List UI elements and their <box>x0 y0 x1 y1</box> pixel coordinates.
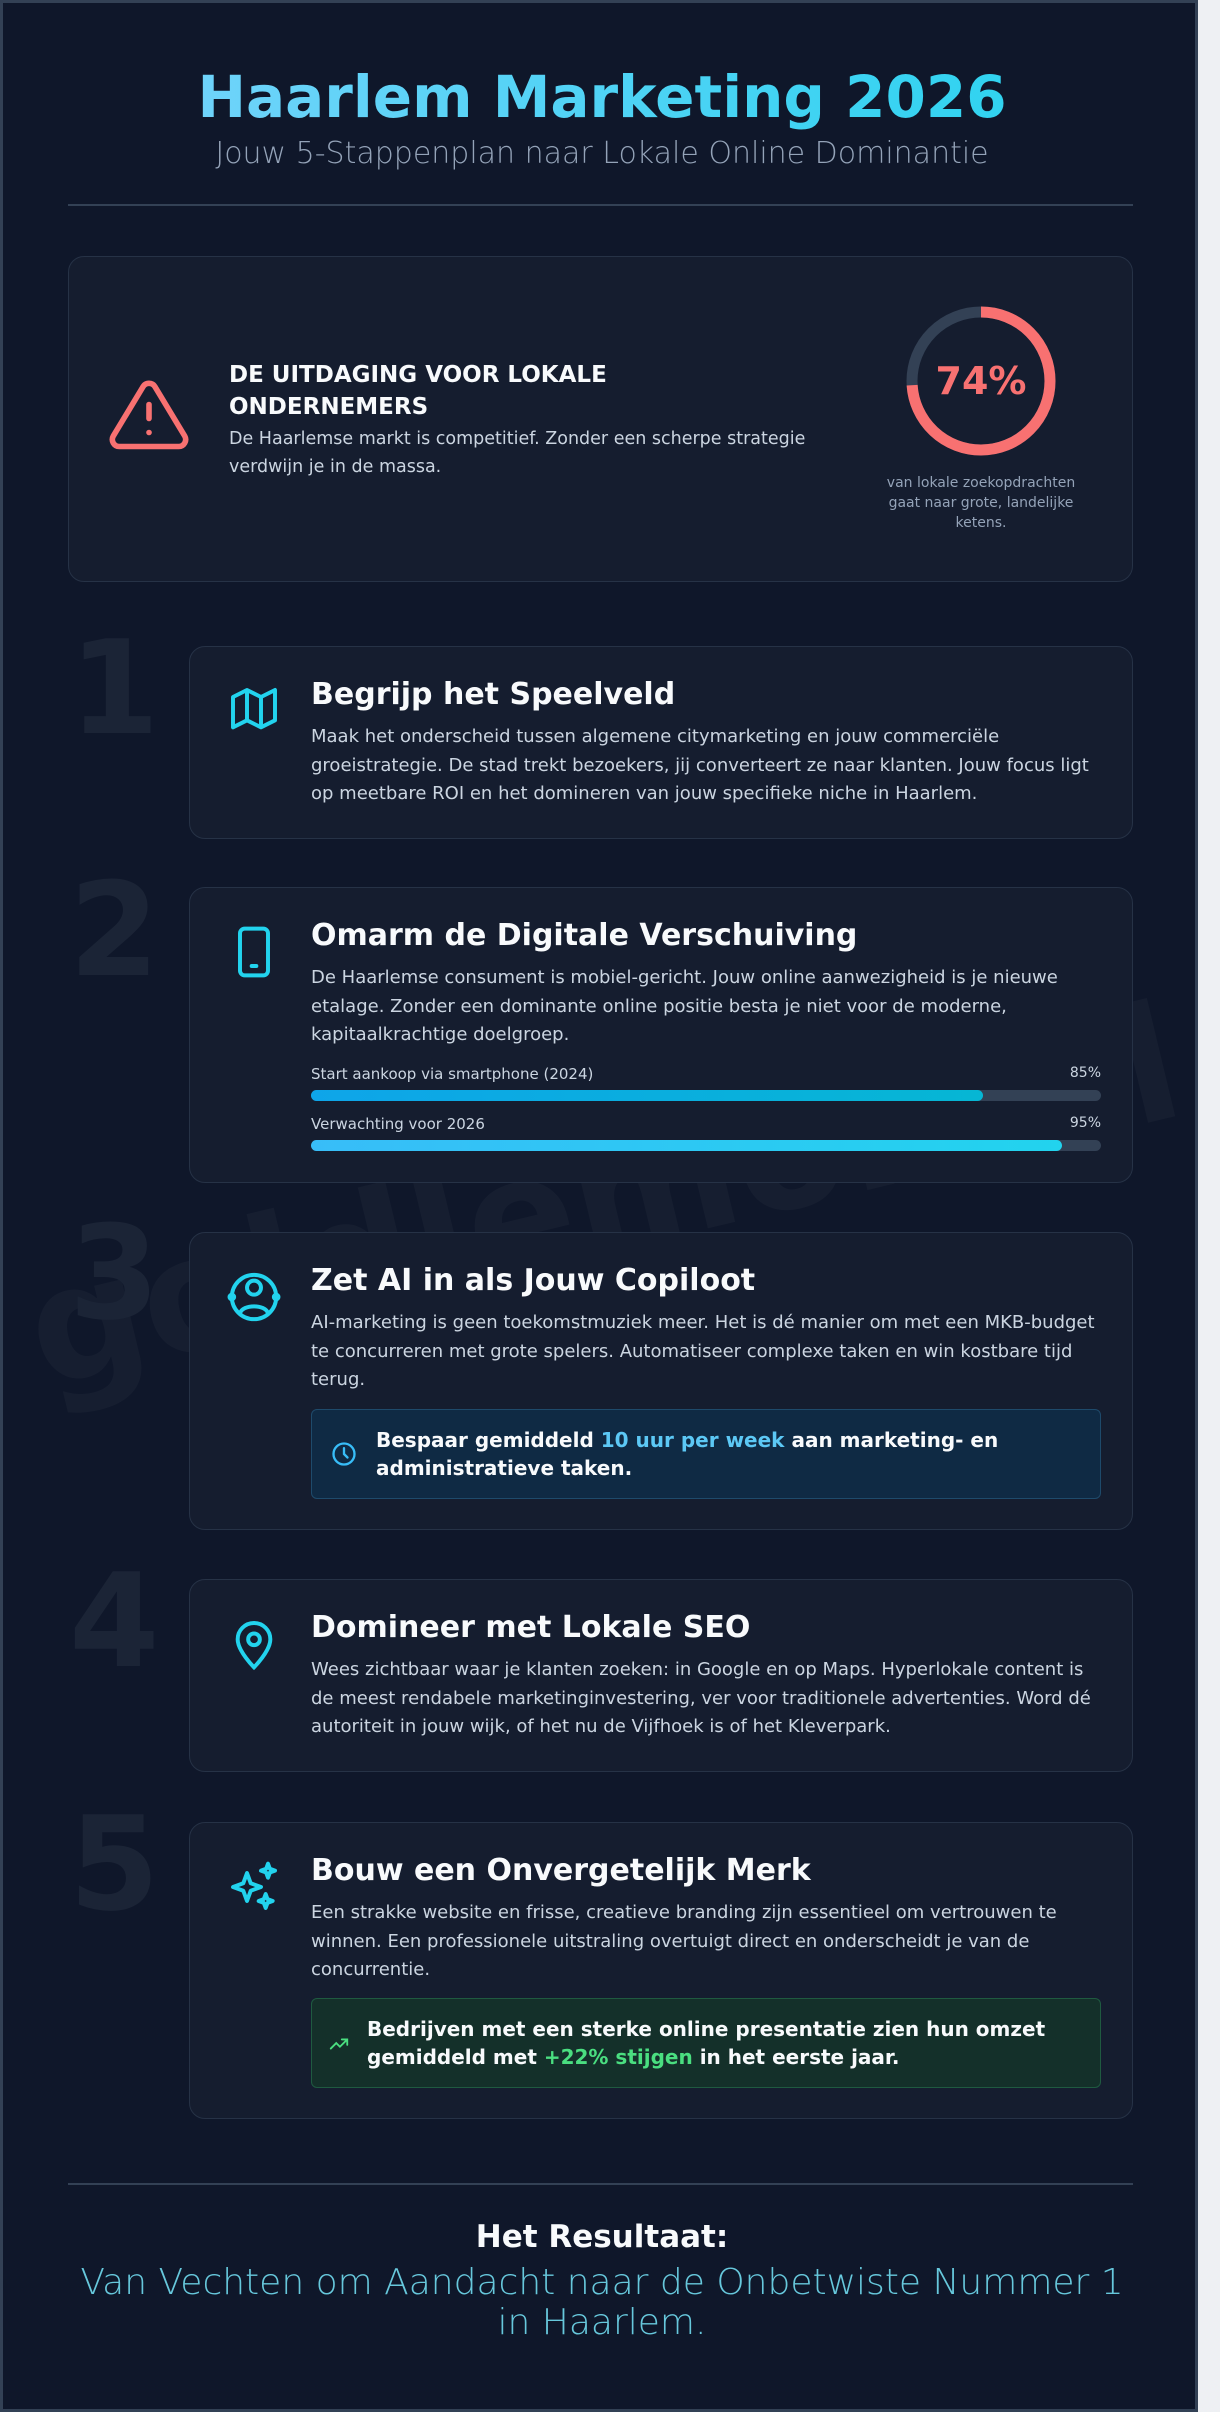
heading: Zet AI in als Jouw Copiloot <box>311 1263 755 1298</box>
icon: clock <box>332 1442 356 1466</box>
callout: time saved: Bespaar gemiddeld 10 uur per week aan marketing- en administratieve taken. <box>376 1428 998 1480</box>
challenge heading: DE UITDAGING VOOR LOKALE ONDERNEMERS <box>229 362 607 420</box>
bar chart <box>311 1065 1101 1151</box>
step number 3: 3 <box>69 1197 159 1349</box>
heading: Begrijp het Speelveld <box>311 677 675 712</box>
icon: smartphone <box>238 926 270 978</box>
icon: AI bot <box>228 1272 280 1322</box>
panel: step 4 <box>189 1579 1133 1772</box>
icon: sparkles <box>231 1862 277 1910</box>
icon: map pin <box>236 1621 272 1670</box>
result heading: Het Resultaat: <box>476 2219 728 2255</box>
bar chart: 85% <box>1070 1065 1101 1081</box>
bar chart: Start aankoop via smartphone (2024) <box>311 1065 593 1083</box>
step number 4: 4 <box>69 1545 159 1697</box>
title: Haarlem Marketing 2026 <box>197 63 1007 131</box>
callout: time saved <box>311 1409 1101 1499</box>
subtitle: Jouw 5-Stappenplan naar Lokale Online Dominantie <box>215 136 989 171</box>
heading: Bouw een Onvergetelijk Merk <box>311 1853 811 1888</box>
challenge text: De Haarlemse markt is competitief. Zonder een scherpe strategie verdwijn je in de massa. <box>229 429 805 477</box>
step number 2: 2 <box>69 854 159 1006</box>
panel: step 2 <box>189 887 1133 1183</box>
heading: Domineer met Lokale SEO <box>311 1610 750 1645</box>
icon: trend up <box>330 2038 348 2050</box>
text: De Haarlemse consument is mobiel-gericht. Jouw online aanwezigheid is je nieuwe etalage. Zonder een dominante online positie besta je niet voor de moderne, kapitaalkrachtige doelgroep. <box>311 967 1058 1045</box>
panel: step 1 <box>189 646 1133 839</box>
watermark: goldlemon.nl <box>9 968 1197 1425</box>
text: Maak het onderscheid tussen algemene citymarketing en jouw commerciële groeistrategie. De stad trekt bezoekers, jij converteert ze naar klanten. Jouw focus ligt op meetbare ROI en het domineren van jouw specifieke niche in Haarlem. <box>311 726 1089 804</box>
icon: warning <box>110 380 188 450</box>
callout: revenue growth: Bedrijven met een sterke online presentatie zien hun omzet gemiddeld met +22% stijgen in het eerste jaar. <box>367 2017 1045 2069</box>
panel: step 3 <box>189 1232 1133 1530</box>
donut chart 74%: 74% <box>936 359 1026 403</box>
icon: map <box>231 688 277 730</box>
text: Wees zichtbaar waar je klanten zoeken: in Google en op Maps. Hyperlokale content is de meest rendabele marketinginvestering, ver voor traditionele advertenties. Word dé autoriteit in jouw wijk, of het nu de Vijfhoek is of het Kleverpark. <box>311 1659 1091 1737</box>
title <box>3 63 1201 131</box>
donut chart 74% <box>887 306 1075 531</box>
panel: challenge <box>68 256 1133 582</box>
donut chart 74%: van lokale zoekopdrachten gaat naar grote, landelijke ketens. <box>887 475 1075 531</box>
text: Een strakke website en frisse, creatieve branding zijn essentieel om vertrouwen te winnen. Een professionele uitstraling overtuigt direct en onderscheidt je van de concurrentie. <box>311 1902 1057 1980</box>
callout: revenue growth <box>311 1998 1101 2088</box>
heading: Omarm de Digitale Verschuiving <box>311 918 857 953</box>
result tagline: Van Vechten om Aandacht naar de Onbetwiste Nummer 1 in Haarlem. <box>80 2262 1124 2343</box>
step number 5: 5 <box>69 1788 159 1940</box>
panel: step 5 <box>189 1822 1133 2119</box>
bar chart: Verwachting voor 2026 <box>311 1115 485 1133</box>
step number 1: 1 <box>69 612 159 764</box>
bar chart: 95% <box>1070 1115 1101 1131</box>
text: AI-marketing is geen toekomstmuziek meer. Het is dé manier om met een MKB-budget te concurreren met grote spelers. Automatiseer complexe taken en win kostbare tijd terug. <box>311 1312 1095 1390</box>
